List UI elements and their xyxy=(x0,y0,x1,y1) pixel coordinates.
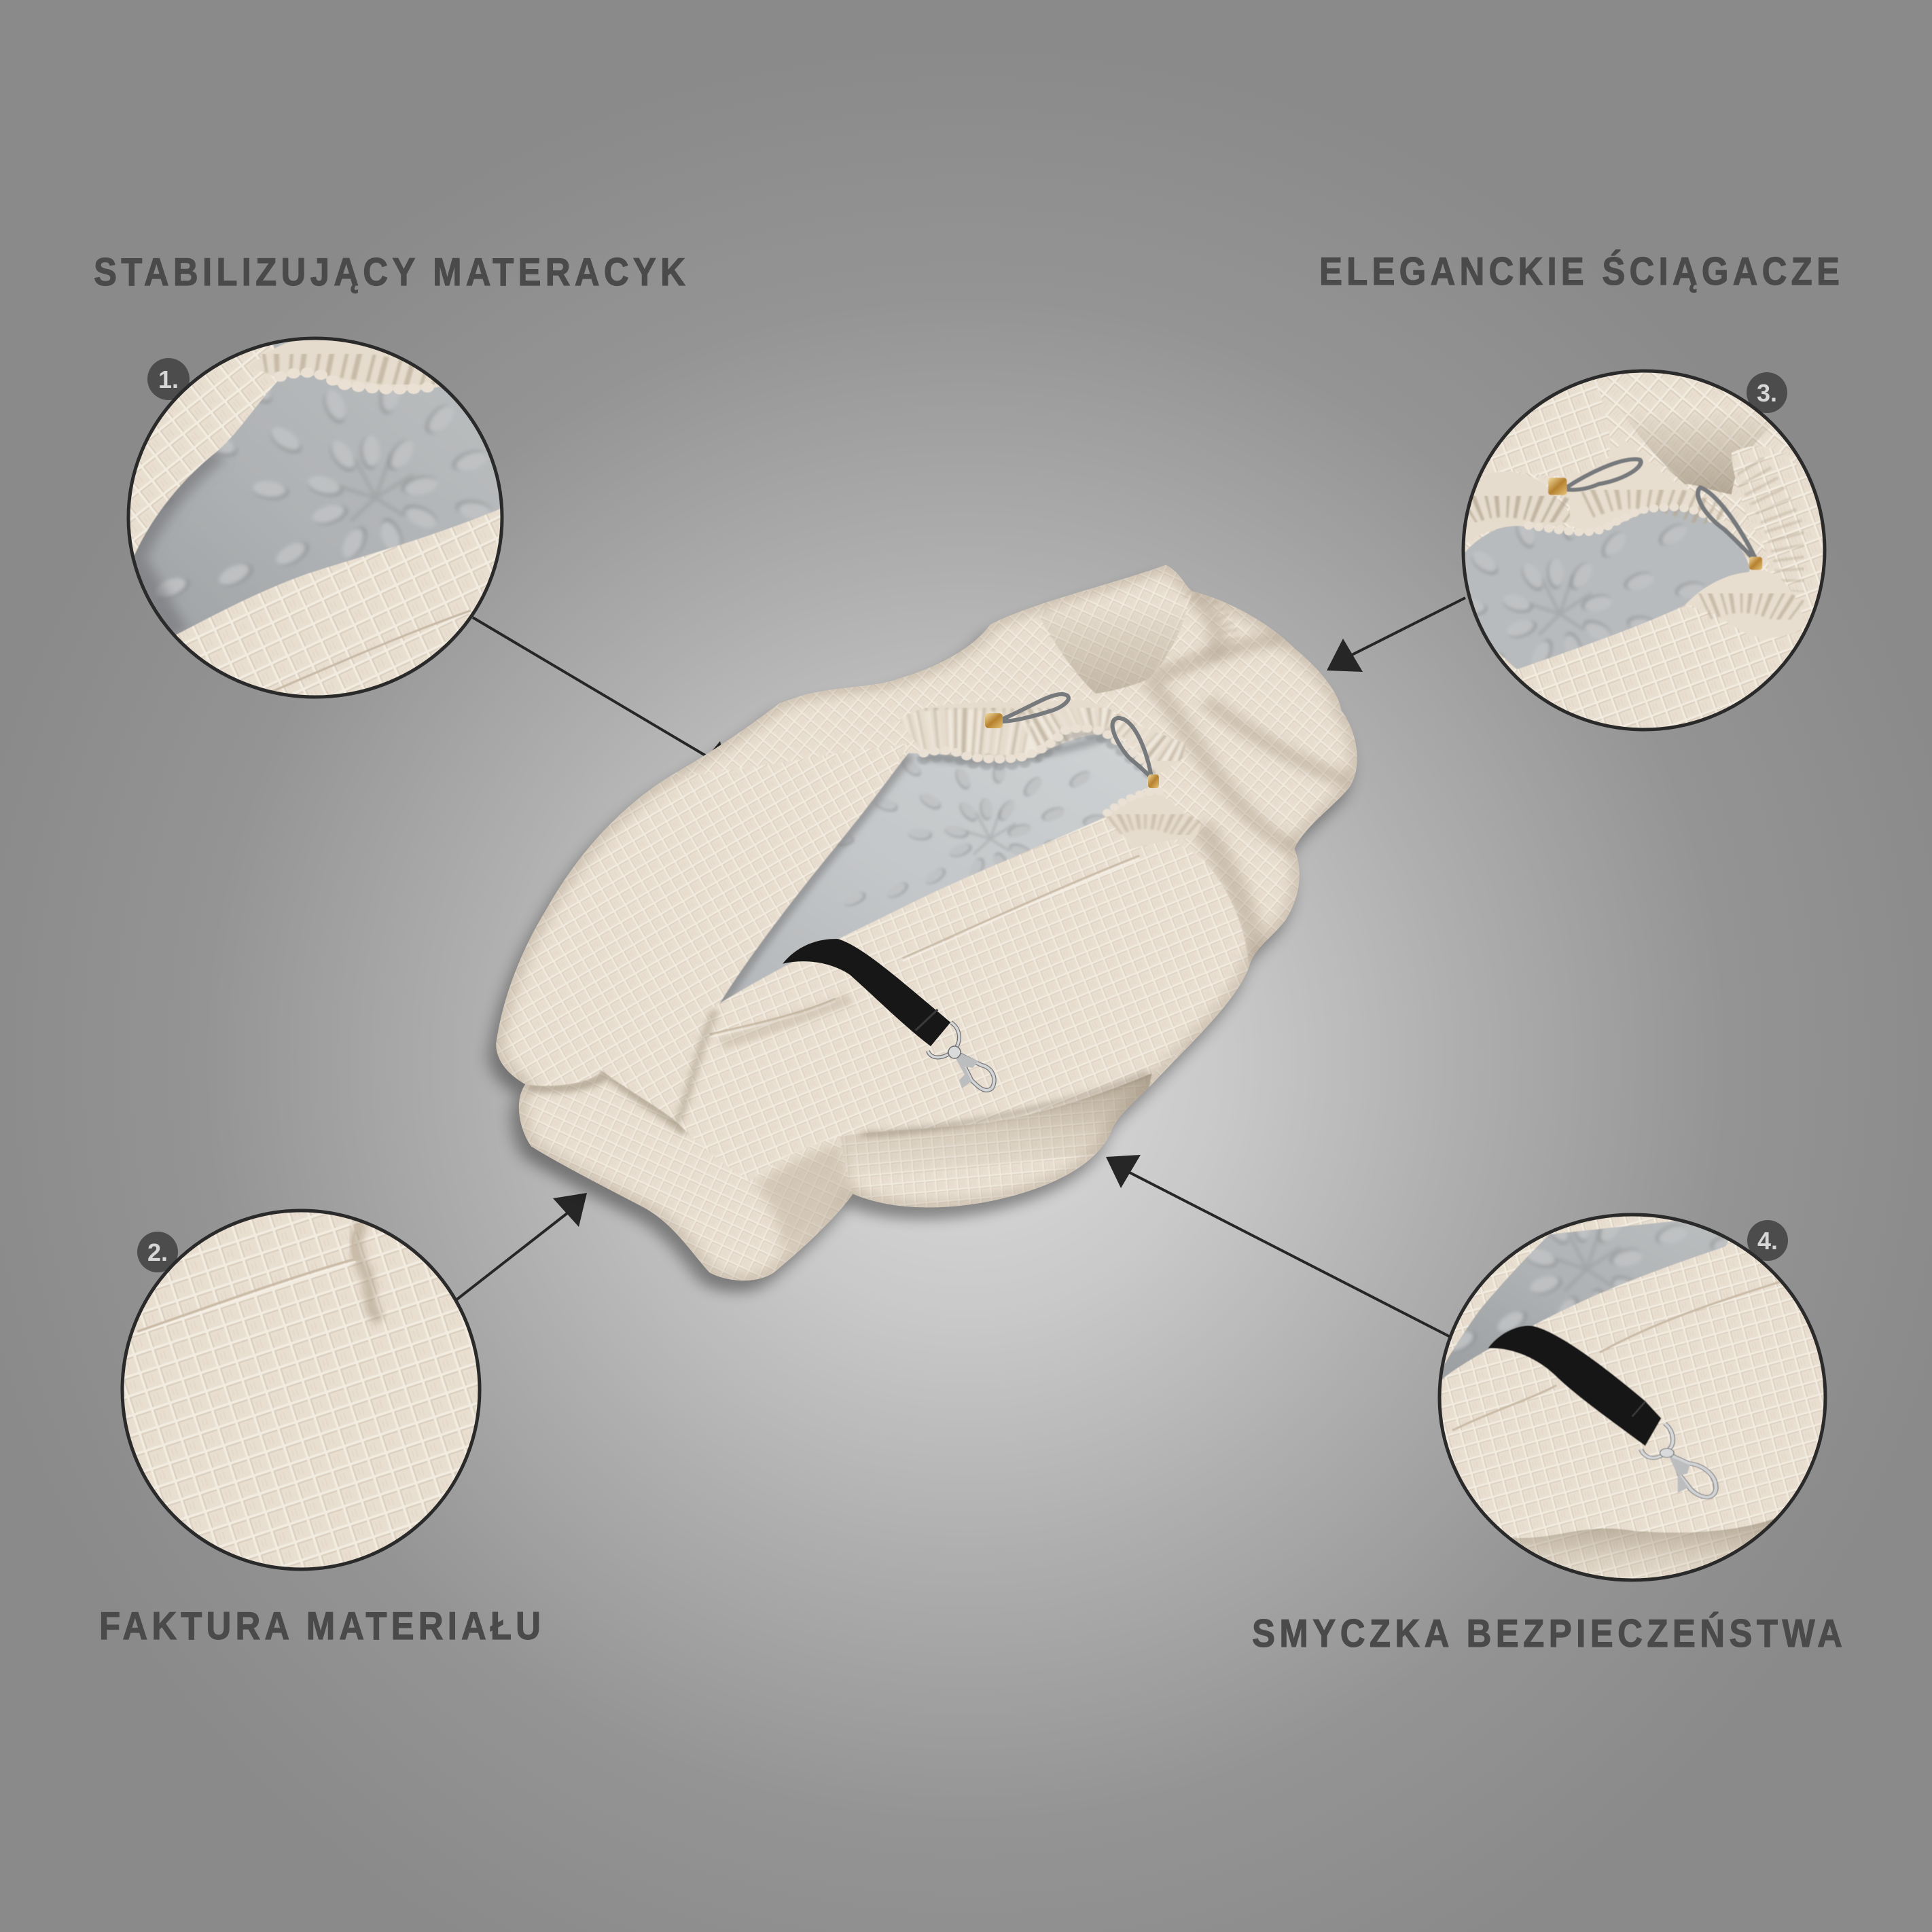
lobe inner fold xyxy=(528,1073,853,1253)
circle photo 4 xyxy=(1372,1111,1838,1612)
right gather panel xyxy=(1732,446,1829,633)
mattress xyxy=(718,734,1148,1005)
product: beige waffle dog carrier xyxy=(476,543,1393,1292)
circle outline 1 xyxy=(128,338,502,697)
upper right fold shadows xyxy=(1148,596,1350,963)
heading: stabilizing mattress: STABILIZUJĄCY MATERACYK xyxy=(94,250,685,294)
leash carabiner xyxy=(928,1022,995,1090)
cord toggle two xyxy=(1698,488,1762,570)
badge 2: 2. xyxy=(147,1238,168,1266)
middle gather xyxy=(1528,439,1732,533)
badge 3: 3. xyxy=(1757,379,1777,407)
circle photo 2 xyxy=(116,1203,487,1577)
lower lobe xyxy=(838,1073,1154,1207)
arrow: leash callout to product xyxy=(1106,1155,1449,1336)
pillow panel xyxy=(1599,373,1770,495)
seam xyxy=(263,611,471,696)
left waffle strip xyxy=(1427,1214,1550,1353)
front waffle rim xyxy=(1517,605,1829,737)
front panel seam xyxy=(709,855,1139,1037)
gray mattress xyxy=(1372,1111,1760,1448)
volume shading at silhouette edge xyxy=(496,565,1357,1281)
callout 4: leash detail xyxy=(1372,1111,1838,1612)
badge 2 xyxy=(137,1232,178,1272)
cord toggle one xyxy=(1548,459,1641,495)
pillow panel xyxy=(1037,565,1192,694)
gray mattress xyxy=(1359,465,1767,782)
circle outline 4 xyxy=(1439,1215,1825,1580)
carabiner xyxy=(1641,1423,1716,1497)
callout 1: mattress detail xyxy=(111,328,551,709)
badge 1: 1. xyxy=(158,365,179,393)
lower gathered rim xyxy=(1105,791,1201,848)
top left panel xyxy=(1463,376,1610,495)
seam xyxy=(1452,1281,1782,1431)
safety leash strap xyxy=(783,939,950,1046)
fold shading xyxy=(356,1221,380,1321)
heading: fabric texture: FAKTURA MATERIAŁU xyxy=(99,1604,541,1648)
drawstring toggle two xyxy=(1113,718,1159,788)
seam xyxy=(137,1221,363,1331)
lower right gather xyxy=(1685,570,1806,638)
left gather xyxy=(1463,471,1572,546)
bottom left lobe xyxy=(519,1070,853,1281)
circle outline 2 xyxy=(122,1211,480,1569)
badge 4 xyxy=(1747,1220,1788,1261)
badge 3 xyxy=(1747,372,1787,413)
callout 2: fabric texture detail xyxy=(116,1203,487,1577)
gather bottom edge xyxy=(924,728,1155,778)
product body xyxy=(496,565,1357,1281)
circle photo 1 xyxy=(111,328,551,709)
left flap xyxy=(496,744,908,1122)
front panel xyxy=(677,817,1249,1182)
circle outline 3 xyxy=(1463,371,1825,730)
product shadow xyxy=(489,576,1350,1292)
front waffle rim xyxy=(176,507,505,702)
drawstring toggle one xyxy=(985,694,1069,728)
front panel edge shading xyxy=(677,999,1148,1134)
badge 1 xyxy=(147,358,190,400)
upper gathered rim xyxy=(885,686,1213,787)
circle photo 3 xyxy=(1359,363,1833,782)
badge 4: 4. xyxy=(1757,1227,1778,1255)
front waffle body xyxy=(1431,1245,1833,1539)
lower lobe xyxy=(1513,1512,1838,1612)
arrow: fabric callout to product xyxy=(456,1193,587,1300)
strap xyxy=(1488,1325,1661,1446)
left waffle flap xyxy=(111,335,281,558)
mattress dimples xyxy=(718,727,1113,1005)
callout 3: drawstring detail xyxy=(1359,363,1833,782)
top gather xyxy=(250,335,441,391)
upper right gather wrinkles xyxy=(1154,591,1230,681)
heading: safety leash: SMYCZKA BEZPIECZEŃSTWA xyxy=(1252,1611,1842,1656)
arrow: drawstring callout to product xyxy=(1327,598,1465,672)
arrow: mattress callout to product xyxy=(473,618,727,771)
heading: elegant drawstrings: ELEGANCKIE ŚCIĄGACZE xyxy=(1319,249,1840,293)
